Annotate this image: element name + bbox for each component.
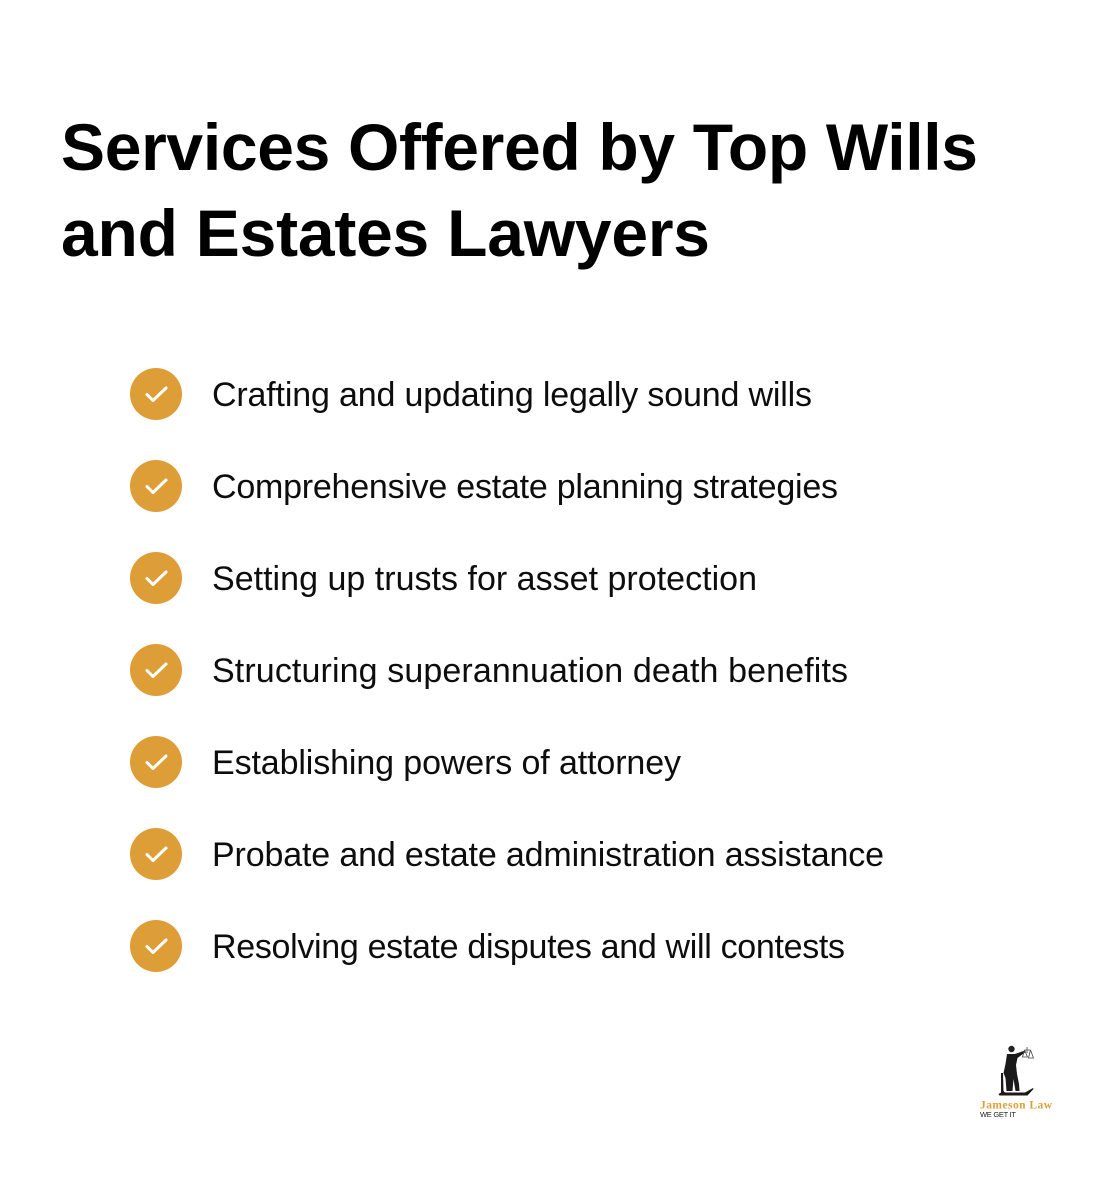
item: superannuation: Structuring superannuation death benefits: [212, 652, 848, 690]
item: powers of attorney: Establishing powers of attorney: [212, 744, 681, 782]
item: trusts: Setting up trusts for asset protection: [212, 560, 757, 598]
item: wills: Crafting and updating legally sound wills: [212, 376, 812, 414]
item: probate: [130, 828, 884, 880]
item: disputes: [130, 920, 845, 972]
brand name: Jameson Law: [980, 1100, 1053, 1112]
item: estate planning: Comprehensive estate planning strategies: [212, 468, 838, 506]
item: superannuation: [130, 644, 848, 696]
item: probate: Probate and estate administration assistance: [212, 836, 884, 874]
title: [61, 110, 978, 270]
item: estate planning: [130, 460, 838, 512]
logo: Jameson Law: [980, 1046, 1053, 1119]
title: and Estates Lawyers: [61, 196, 710, 270]
item: trusts: [130, 552, 757, 604]
title: Services Offered by Top Wills: [61, 110, 978, 184]
item: disputes: Resolving estate disputes and will contests: [212, 928, 845, 966]
item: wills: [130, 368, 812, 420]
checklist: [130, 368, 884, 972]
icon: lady justice: [998, 1046, 1034, 1096]
tagline: WE GET IT: [980, 1110, 1016, 1119]
item: powers of attorney: [130, 736, 681, 788]
